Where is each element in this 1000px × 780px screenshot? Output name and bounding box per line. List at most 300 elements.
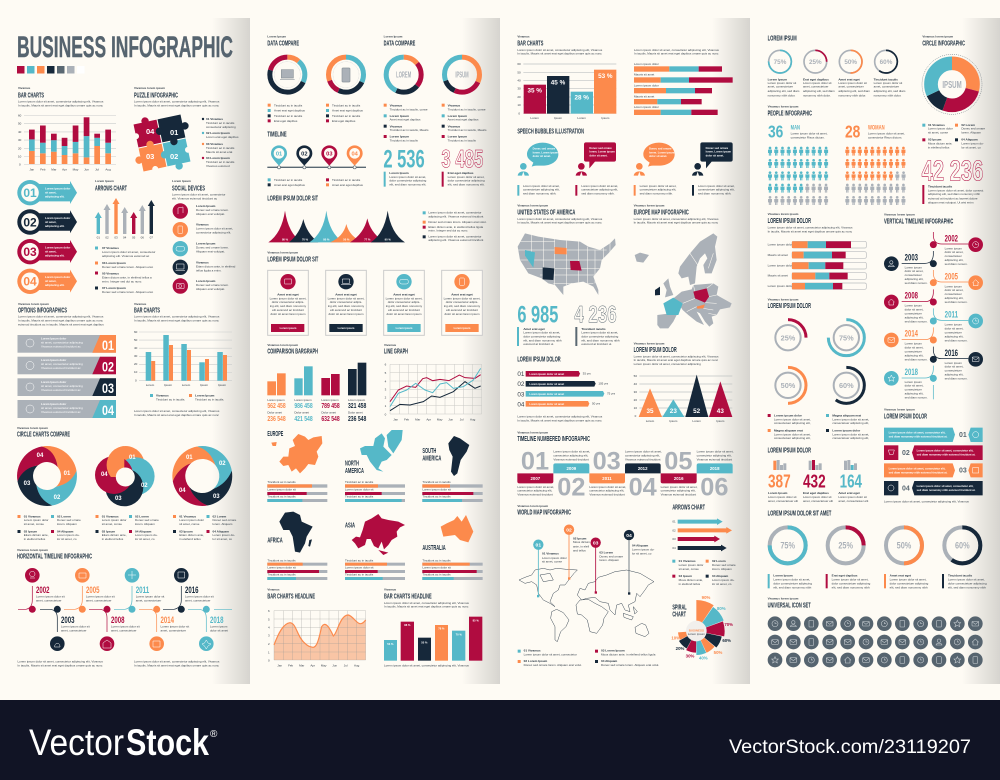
up arrows chart: 03	[114, 236, 118, 240]
gauge notes: nonummy nibh dolor.	[874, 93, 902, 97]
large gauge 25: 25%	[838, 541, 854, 551]
puzzle legend	[202, 117, 239, 168]
bubble captions: Lorem ipsum dolor sit amet,	[581, 184, 618, 188]
gauge notes: nonummy nibh dolor.	[803, 93, 831, 97]
timeline icons	[884, 237, 983, 386]
large gauge notes: Lorem ipsum dolor sit amet,	[890, 577, 927, 581]
pill 03: 03	[23, 245, 37, 259]
banner 03: 03	[959, 468, 967, 475]
section: stacked tracks: In iaculis, Mauris sit amet erat eget dapibus ornare quis ac nunc	[768, 229, 853, 233]
arrows legend 2	[672, 559, 736, 586]
stat: man: 36	[768, 122, 783, 142]
section: ring gauges: Vivamus lorem ipsum	[768, 297, 799, 301]
pill 04: sit amet,	[45, 279, 57, 283]
legend right: Tincidunt ac in iaculis, conse	[448, 107, 486, 111]
spiral percentages: 80%	[717, 606, 726, 611]
circle legends	[18, 514, 237, 541]
big number: 2 536: Lorem Ipsum	[389, 171, 409, 175]
gauge legend: Lorem ipsum dolor sit amet,	[774, 432, 811, 436]
stacked tracks chart: Lorem ipsum dolor	[768, 243, 792, 247]
grouped bars	[134, 330, 232, 387]
comparison numbers: Lorem ipsum	[267, 398, 285, 402]
stat numbers: 387	[768, 471, 791, 492]
big number: 42 236: euismod at tincidunt ac laoreet dolore	[928, 196, 978, 200]
heading: bar charts headline: BAR CHARTS HEADLINE	[267, 594, 315, 601]
social icon list: Lorem Ipsum	[196, 279, 216, 283]
banner 02: Lorem ipsum dolor sit amet, consectetur elit,	[917, 448, 974, 452]
section: comparison bargraph	[267, 343, 366, 423]
large gauge notes: elit, sed diam nonummy nibh	[832, 586, 870, 590]
map pins: 02	[566, 528, 572, 534]
bubble two	[584, 142, 616, 168]
mountain legend: adipiscing elit. Vivamus euismod tincidunt	[428, 214, 484, 218]
gauge notes: adipiscing elit, sed diam	[838, 89, 871, 93]
world legend: 04 Aliquam	[601, 659, 618, 663]
step notes: consectetur adipiscing elit,	[517, 489, 553, 493]
social icon list: Aliquam erat volutpat.	[196, 212, 225, 216]
option rows: 03	[102, 380, 114, 396]
section: bar charts headline right: In iaculis, Mauris sit amet erat eget dapibus ornare quis ac nunc	[384, 605, 469, 609]
section: options infographics: Vivamus lorem ipsum	[18, 302, 49, 306]
timeline notes: Lorem ipsum	[905, 380, 922, 384]
paired bars	[267, 363, 366, 395]
donut: ipsum	[444, 57, 479, 92]
swirl circle 3: 03	[213, 494, 220, 500]
social icon list: tellus ligula a enim.	[196, 268, 222, 272]
line chart: 3	[385, 388, 387, 392]
stacked bar chart: Mar	[51, 168, 56, 172]
donut legend: Tincidunt ac in iaculis	[332, 103, 361, 107]
section: triangles chart	[634, 341, 732, 423]
year steps: 2007	[531, 476, 541, 481]
spiral centre	[686, 621, 707, 641]
big number: 4 236: euismod at tincidunt ut.	[581, 342, 612, 346]
section: continent north america	[345, 430, 405, 502]
legend right: Vivamus	[448, 124, 461, 128]
triangle chart: 23	[670, 408, 677, 415]
mountain peaks: 77 %	[364, 238, 371, 242]
bars: australia: Lorem ipsum dolor sit	[422, 566, 451, 570]
donut legend: 04 Aliquam	[961, 138, 978, 142]
circle legends: lor sit amet, co	[135, 537, 155, 541]
bars: africa: Tincidunt ac in iaculis	[267, 558, 296, 562]
map pins: 04	[626, 533, 632, 539]
bars with percentages: 20	[517, 95, 521, 99]
map: south america	[448, 436, 469, 476]
circle legends: Donec sed ornare	[135, 518, 159, 522]
gauge notes: Lorem Ipsum	[768, 77, 787, 81]
percent bars: 85 %	[473, 619, 479, 623]
timeline notes: dolor sit amet,	[945, 288, 964, 292]
stacked bar chart: 30	[18, 138, 22, 142]
percent bars: 88 %	[404, 623, 411, 627]
spiral percentages: 20%	[676, 646, 684, 651]
puzzle numbers	[146, 127, 178, 161]
people grid: man	[768, 147, 828, 205]
timeline years and notes: amet, consectetuer	[111, 628, 137, 632]
gauge notes: Erat eget dapibus	[803, 77, 829, 81]
stacked bar chart: May	[73, 168, 79, 172]
big step numbers: 01	[521, 447, 549, 475]
heading: timeline: TIMELINE	[267, 132, 287, 139]
arrows legend	[95, 246, 155, 294]
section: lorem ipsum dolor sit amet gauges	[768, 511, 987, 590]
timeline years: 2014	[905, 329, 918, 339]
big number: 4 236: Lorem ipsum dolor sit amet,	[581, 331, 618, 335]
large gauge notes: Amet erat eget	[890, 573, 911, 577]
bubble two: dolor sit amet.	[589, 153, 608, 157]
map pins: 03	[593, 541, 599, 547]
circle legends: sit amet, conse	[24, 522, 44, 526]
pointed bars: 03	[517, 391, 525, 398]
donut legend: Amet erat eget dapibus	[274, 109, 305, 113]
social icon list: Lorem Ipsum	[196, 242, 216, 246]
world legend: Donec sed ornare lorem. Aliquam erat volut.	[524, 663, 582, 667]
big step numbers: 06	[700, 474, 728, 502]
heading: circle charts: CIRCLE CHARTS COMPARE	[17, 432, 70, 439]
card 2: elit euismod ac tincidunt	[330, 308, 362, 312]
timeline years: 2018	[905, 367, 918, 377]
timeline years and notes: amet, consectetuer	[136, 598, 161, 602]
puzzle legend: Tincidunt ac in iaculis	[206, 121, 235, 125]
section: grouped bar chart: In iaculis, Mauris sit amet erat eget dapibus ornare quis ac nunc	[134, 318, 219, 322]
bars: asia: Tincidunt ac in iaculis	[345, 573, 374, 577]
bars with percentages: 53 %	[598, 73, 613, 80]
donut legend: Lorem ipsum dolor	[928, 127, 953, 131]
section: percent bar chart: Lorem ipsum dolor sit amet, consectetur adipiscing elit, Vivamus	[517, 48, 603, 52]
step notes: Vivamus euismod tincidunt	[625, 457, 661, 461]
large gauge 50: 50%	[897, 541, 912, 551]
bars: europe	[267, 480, 327, 502]
large gauge notes: Erat eget dapibus	[832, 573, 858, 577]
big number: 4 236	[574, 301, 620, 346]
section: area chart	[267, 588, 366, 667]
line chart: 4	[385, 379, 387, 383]
year steps: 2009	[567, 466, 577, 471]
timeline notes: consectetuer	[905, 273, 922, 277]
bubble captions: consectetuer adipiscing elit,	[523, 188, 560, 192]
step notes: Lorem ipsum dolor sit amet,	[553, 450, 590, 454]
bar legend: Lorem Ipsum	[195, 394, 215, 398]
line chart: 2	[385, 396, 387, 400]
card 3: ing elit, sed diam nonummy	[386, 304, 423, 308]
bubble four: lorem. Lorem ipsum	[706, 150, 732, 154]
legend right: Lorem Ipsum	[390, 135, 409, 139]
stacked tracks chart: Mauris sit amet	[768, 274, 788, 278]
timeline years and notes: 2008	[111, 615, 124, 625]
big number: 42 236: Tincidunt iaculis	[928, 184, 953, 188]
heading: lorem ipsum dolor gauges: LOREM IPSUM DOLOR	[768, 303, 811, 310]
option rows: sit amet, consectetur adipiscing	[41, 406, 83, 410]
card 4: dolor consectetur adipis-	[446, 300, 478, 304]
pointed bars: Lorem ipsum dolor sit amet	[529, 402, 564, 406]
percent bars	[384, 617, 482, 661]
timeline connectors	[18, 586, 232, 632]
large gauge notes: elit, sed diam nonummy nibh	[890, 586, 928, 590]
puzzle graphic	[127, 109, 197, 178]
section: puzzle infographic: Lorem ipsum dolor sit amet, consectetur adipiscing elit, Vivamus	[134, 100, 220, 104]
big number: 2 536: elit, sed diam nonummy elit.	[389, 183, 426, 187]
donut legend: Amet erat eget dapibus	[332, 109, 363, 113]
comparison numbers: 321 458	[348, 401, 366, 410]
legend right: Vivamus	[390, 124, 403, 128]
comparison numbers: Lorem ipsum	[321, 398, 339, 402]
world legend	[518, 649, 659, 667]
bars: south america: Tincidunt ac in iaculis	[422, 480, 451, 484]
bars: africa	[267, 558, 327, 580]
heading: data compare 2: DATA COMPARE	[384, 41, 416, 48]
grouped bars: Lorem	[146, 383, 155, 387]
card 2: Lorem ipsum dolor sit amet,	[328, 296, 365, 300]
social icon list: consectetur adipiscing elit.	[196, 231, 231, 235]
step notes: Vivamus euismod tincidunt	[553, 457, 589, 461]
section: small gauges	[768, 36, 906, 97]
line chart: 5	[385, 371, 387, 375]
spiral centre: Lorem ipsum	[688, 632, 705, 636]
section: cards: Vivamus lorem ipsum	[267, 250, 298, 254]
triangle chart: 52	[693, 408, 701, 415]
timeline notes: dolor sit amet,	[945, 326, 964, 330]
card 4: Lorem ipsum	[454, 326, 471, 330]
circle legends: lor sit amet, co	[212, 537, 232, 541]
comparison numbers: 789 458	[321, 401, 340, 410]
donut legend	[268, 103, 363, 123]
arrows legend: 05 Vivamus	[102, 272, 119, 276]
stat: man: Lorem ipsum dolor sit amet,	[791, 132, 828, 136]
puzzle numbers: 03	[146, 152, 154, 161]
bubble three: dolor sit amet.	[649, 154, 667, 158]
card 2: Amet erat eget	[335, 292, 357, 296]
card 4: ing elit, sed diam nonummy	[444, 304, 481, 308]
heading: mini stats: LOREM IPSUM DOLOR	[768, 448, 811, 455]
up arrows chart: 06	[141, 236, 144, 240]
area chart: Feb	[288, 663, 294, 667]
map: asia	[352, 514, 405, 555]
stat notes: amet, consectetuer elit	[838, 499, 869, 503]
section: continent asia	[345, 514, 405, 580]
spiral percentages: 10%	[671, 635, 680, 640]
card 1: dolor sit amet lorem ipsum	[270, 312, 306, 316]
spiral centre: BUSINESS	[689, 629, 704, 633]
section: triangles chart: Vivamus lorem ipsum	[634, 341, 665, 345]
section: data compare left: Lorem Ipsum	[267, 35, 286, 39]
section: bar charts headline right	[384, 588, 482, 667]
big number: 3 485: elit, sed diam nonummy elit.	[448, 183, 485, 187]
timeline years: 2008	[905, 291, 918, 301]
horizontal arrows: 03	[672, 537, 676, 541]
puzzle legend: Lorem erat eget dapibus	[206, 135, 239, 139]
stacked bar chart: Feb	[40, 168, 46, 172]
stat notes: amet, consectetuer elit	[803, 499, 833, 503]
circle legends: sit amet, conse	[179, 522, 200, 526]
option rows: Vivamus euismod tincidunt ac	[41, 410, 81, 414]
year steps	[517, 463, 733, 483]
image id: VectorStock.com/23119207	[729, 736, 971, 758]
line chart: Jan	[393, 417, 398, 421]
gauge legend: Magna aliquam erat	[774, 428, 803, 432]
stacked bar chart: Apr	[62, 168, 67, 172]
section: bar charts headline right: Vivamus	[384, 588, 397, 592]
timeline footer text	[18, 660, 220, 668]
large gauge 75	[770, 527, 806, 563]
pill 01	[17, 180, 77, 205]
section: europe map	[634, 204, 732, 328]
bar legend: Tincidunt ac in iaculis.	[195, 398, 224, 402]
spiral percentages: 50%	[714, 650, 722, 655]
bars with percentages: Ipsum	[554, 116, 563, 120]
timeline years and notes: Lorem ipsum	[210, 624, 228, 628]
large gauge notes: dolor consectetuer adipiscing	[773, 581, 812, 585]
up arrows chart	[95, 198, 155, 240]
circle legends: sit amet, conse	[102, 522, 122, 526]
line chart: Apr	[426, 417, 431, 421]
section: timeline numbered	[517, 430, 734, 502]
gauge legend: consectetuer adipiscing elit,	[832, 436, 869, 440]
line chart	[385, 363, 482, 421]
section: people infographic: Vivamus lorem ipsum	[768, 104, 799, 108]
card 1: Lorem ipsum dolor sit amet,	[270, 296, 307, 300]
triangle chart	[634, 374, 732, 423]
heading: icon set: UNIVERSAL ICON SET	[768, 602, 811, 609]
section: stacked tracks	[768, 212, 866, 289]
social icon list: Lorem ipsum dolor sit amet,	[196, 227, 233, 231]
timeline years: 2011	[945, 310, 958, 320]
timeline years and notes: 2002	[36, 585, 50, 595]
bubble two: Donec sed ornare	[589, 146, 612, 150]
bars with percentages: Lorem	[530, 116, 539, 120]
mountain legend: Etiam dictum ante, in eleifend tellus ligula	[428, 225, 483, 229]
mountain peaks: 80 %	[323, 238, 330, 242]
big number: 4 236: elit, and diam nonummy nibh	[581, 338, 620, 342]
card 3	[384, 270, 424, 335]
circle legends: lor sit amet, co	[57, 537, 77, 541]
bubble one: lorem. Lorem ipsum	[533, 150, 559, 154]
circle legends: Donec sed ornare	[57, 518, 81, 522]
stat notes: Lorem ipsum dolor sit	[838, 495, 867, 499]
bars with percentages	[517, 62, 616, 120]
step notes: consectetur adipiscing elit,	[661, 489, 696, 493]
spiral percentages: 70%	[724, 622, 733, 627]
bubble captions: sed diam nonummy nibh.	[640, 192, 673, 196]
arrows legend 2: 04 Aliquam	[712, 574, 729, 578]
section: grouped bar chart: In iaculis, Mauris sit amet erat eget dapibus ornare quis ac nunc	[134, 413, 219, 417]
donut legend: Tincidunt ac in iaculis	[274, 114, 303, 118]
gauge legend: consectetuer adipiscing elit,	[832, 421, 869, 425]
large gauge notes: dolor consectetuer adipiscing	[890, 581, 929, 585]
gauge legend	[768, 413, 869, 440]
gauge notes	[768, 77, 906, 97]
person one	[518, 163, 529, 176]
spiral percentages	[671, 595, 733, 661]
banner 03	[884, 463, 983, 477]
legend right: Vivamus	[448, 103, 461, 107]
big number: 6 985: Lorem ipsum dolor sit amet,	[523, 331, 560, 335]
timeline notes: dolor sit amet,	[905, 307, 924, 311]
puzzle legend: Tincidunt ac in iaculis	[206, 160, 235, 164]
bars with percentages: 60	[517, 62, 521, 66]
donut legend: Erat eget dapibus	[332, 119, 356, 123]
stacked horizontal bars: In iaculis, Mauris sit amet erat eget dapibus ornare quis ac nunc	[634, 52, 719, 56]
bubble three	[643, 143, 675, 167]
pin legend: Amet erat eget dapibus	[332, 183, 363, 187]
logo: Stock	[126, 722, 209, 763]
pin notes: lor sit amet, co	[632, 551, 652, 555]
timeline years and notes: 2011	[136, 585, 149, 595]
card 2: Lorem ipsum	[338, 326, 355, 330]
option rows	[18, 335, 116, 418]
section: continent south america: AMERICA	[422, 455, 441, 462]
stat numbers: 164	[840, 471, 862, 492]
donut legend: lorem. Aliquam	[961, 131, 982, 135]
section: vertical timeline	[884, 213, 983, 400]
gauge 50: 50%	[844, 59, 857, 66]
gauge legend: Lorem ipsum dolor sit amet,	[832, 417, 869, 421]
stat notes: Lorem ipsum dolor sit	[768, 495, 797, 499]
pin notes: 03 Lorem	[599, 550, 613, 554]
world legend: Mous dictum ante, in eleifend tellus ligula	[601, 653, 656, 657]
pins: 01	[276, 151, 282, 157]
puzzle legend: 04 Lorem Ipsum	[206, 156, 230, 160]
donut label: lorem: LOREM	[396, 70, 411, 79]
timeline notes: consectetuer	[945, 369, 962, 373]
bars with percentages: 40	[517, 78, 521, 82]
puzzle legend: 03 Vivamus	[206, 142, 223, 146]
mountain peaks: 50 %	[343, 238, 350, 242]
legend right: Tincidunt ac in iaculis, Mauris	[390, 128, 429, 132]
banner 01	[884, 428, 983, 442]
legend right: Tincidunt ac in iaculis, conse	[390, 107, 428, 111]
section: data compare right	[384, 35, 487, 142]
bubble captions	[517, 184, 735, 196]
percent bars: 53 %	[387, 642, 394, 646]
banner 01: sed diam nonummy nibh euismod tincidunt at.	[889, 435, 948, 439]
comparison numbers	[267, 398, 366, 423]
up arrows chart: 07	[150, 236, 153, 240]
step notes: consectetur adipiscing elit,	[697, 453, 732, 457]
area chart: 2	[268, 642, 270, 646]
spiral percentages: 60%	[722, 638, 731, 643]
timeline footer text: Lorem ipsum dolor sit amet, consectetur adipiscing elit, Vivamus	[134, 660, 220, 664]
swirl circle 1: 03	[24, 481, 31, 487]
donut legend: Erat eget dapibus	[274, 119, 298, 123]
banner 04: Lorem ipsum dolor sit amet, consectetur elit,	[917, 484, 974, 488]
pill 01: sit amet,	[45, 190, 57, 194]
section: europe map: Vivamus lorem ipsum	[634, 204, 665, 208]
pins: 03	[326, 151, 332, 157]
big number: 2 536: Lorem ipsum dolor sit amet,	[389, 175, 426, 179]
year steps: 2012	[638, 466, 648, 471]
donut legend	[922, 123, 985, 149]
stacked tracks chart: Lorem ipsum dolor	[768, 263, 792, 267]
big step numbers: 03	[593, 447, 621, 475]
card 4: elit euismod ac tincidunt	[446, 308, 478, 312]
triangle chart: 43	[717, 408, 724, 415]
bars: asia: Lorem ipsum dolor sit	[345, 566, 374, 570]
gauge notes: Lorem ipsum dolor sit	[803, 81, 832, 85]
stacked bar chart: 50	[18, 122, 22, 126]
puzzle numbers: 04	[146, 127, 155, 136]
banner 04	[884, 481, 983, 495]
banner 03: sed diam nonummy nibh euismod tincidunt at.	[889, 470, 948, 474]
arrows legend: 07 Lorem Ipsum	[102, 286, 126, 290]
big number: 6 985	[517, 301, 562, 346]
bars with percentages: 45 %	[551, 79, 566, 86]
large donut	[922, 54, 982, 114]
large gauge notes: elit, sed diam nonummy nibh	[948, 586, 986, 590]
big step numbers	[521, 447, 728, 502]
triangle chart: Ipsum	[716, 419, 725, 423]
stat: woman: consectetur Risus dictum.	[868, 135, 902, 139]
